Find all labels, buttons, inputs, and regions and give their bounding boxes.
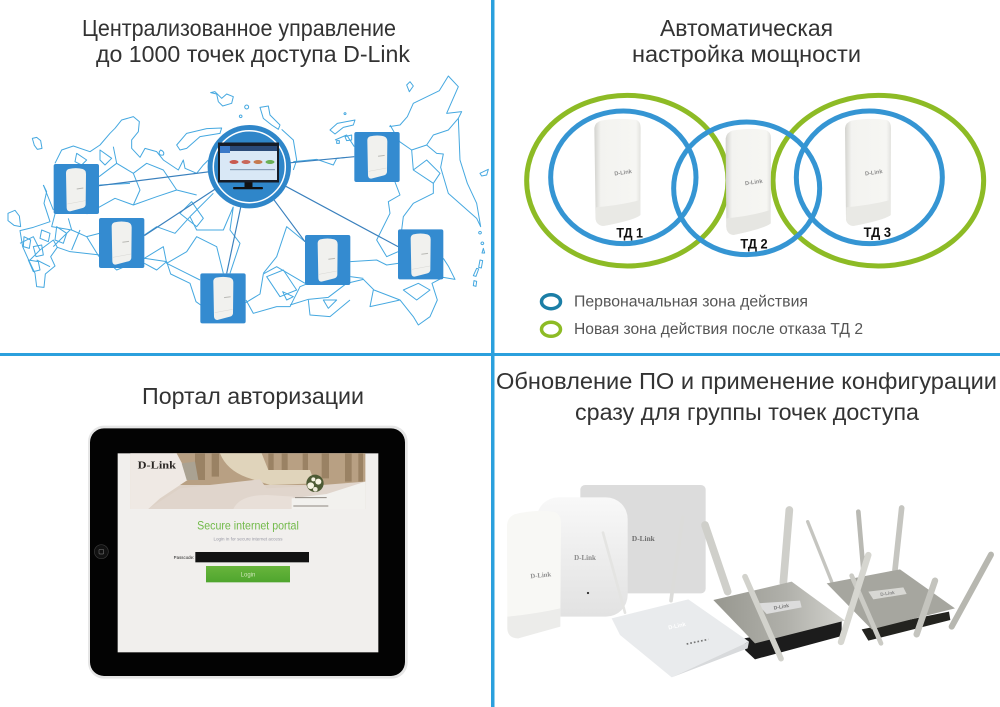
- tablet frame: [88, 426, 408, 679]
- outdoor access point: D-Link: [530, 571, 552, 580]
- screen: [118, 453, 378, 652]
- title: centralized management: Централизованное управление: [82, 15, 396, 41]
- initial coverage zones: [551, 111, 942, 255]
- label: AP 1: ТД 1: [616, 226, 643, 241]
- access point 3: D-Link: [865, 169, 884, 178]
- title: firmware update: Обновление ПО и применение конфигурации: [496, 368, 997, 394]
- portal heading: Secure internet portal: [197, 520, 299, 533]
- dome access point: [537, 497, 628, 617]
- label: AP 3: ТД 3: [864, 225, 891, 240]
- passcode field: Passcode:: [174, 555, 194, 560]
- title: centralized management: [82, 15, 410, 67]
- title: automatic power adjustment: [632, 15, 861, 67]
- title: automatic power adjustment: Автоматическая: [660, 15, 833, 41]
- access point 1: D-Link: [614, 169, 633, 178]
- black and silver access point: [705, 510, 868, 659]
- portal subtitle: Login in for secure internet access: [213, 537, 282, 542]
- panel: firmware and configuration update: [496, 368, 997, 677]
- flat panel access point: [580, 485, 706, 593]
- flat panel access point: D-Link: [632, 534, 656, 543]
- divider: horizontal: [0, 353, 1000, 356]
- access point 2: D-Link: [745, 179, 764, 187]
- panel: automatic power adjustment: [527, 15, 984, 338]
- tablet: [88, 426, 408, 679]
- grey access point with antennas: D-Link: [880, 590, 895, 597]
- dome access point: D-Link: [574, 554, 596, 562]
- white access point with antennas: D-Link: [668, 622, 687, 631]
- login button: [206, 566, 290, 582]
- divider: vertical: [491, 0, 494, 707]
- product group: [507, 485, 991, 677]
- title: firmware update: сразу для группы точек доступа: [575, 399, 920, 425]
- white access point with antennas: [603, 517, 749, 677]
- connector lines: [99, 157, 398, 273]
- icon: access point tile 6: [354, 132, 400, 182]
- icon: access point tile 5: [398, 229, 443, 279]
- black and silver access point: D-Link: [773, 603, 790, 612]
- icon: access point tile 4: [305, 235, 350, 285]
- title: centralized management: до 1000 точек доступа D-Link: [96, 41, 410, 67]
- title: firmware update: [496, 368, 997, 425]
- grey access point with antennas: [808, 508, 991, 643]
- panel: centralized management map: [8, 15, 488, 325]
- icon: access point tile 1: [54, 164, 99, 214]
- icon: access point tile 3: [200, 273, 246, 323]
- access point 1: [594, 119, 641, 226]
- access point 3: [845, 119, 891, 226]
- passcode field: [174, 552, 309, 562]
- icon: controller monitor in circle: [208, 125, 291, 208]
- map of Russia: [8, 76, 488, 325]
- login button: Login: [241, 572, 255, 578]
- legend: new coverage: Новая зона действия после отказа ТД 2: [574, 321, 863, 338]
- icon: access point tile 2: [99, 218, 144, 268]
- new coverage zones: [527, 95, 984, 266]
- home button: [94, 545, 108, 559]
- label: AP 2: ТД 2: [740, 236, 768, 251]
- hotel photo banner: D-Link: [138, 460, 176, 471]
- title: authorization portal: Портал авторизации: [142, 383, 364, 409]
- outdoor access point: [507, 511, 561, 638]
- panel: authorization portal: [88, 383, 408, 679]
- hotel photo banner: [130, 453, 365, 509]
- access point 2: [726, 129, 771, 235]
- coverage diagram: [527, 95, 984, 266]
- legend: initial coverage: Первоначальная зона действия: [574, 294, 808, 310]
- title: automatic power adjustment: настройка мощности: [632, 41, 861, 67]
